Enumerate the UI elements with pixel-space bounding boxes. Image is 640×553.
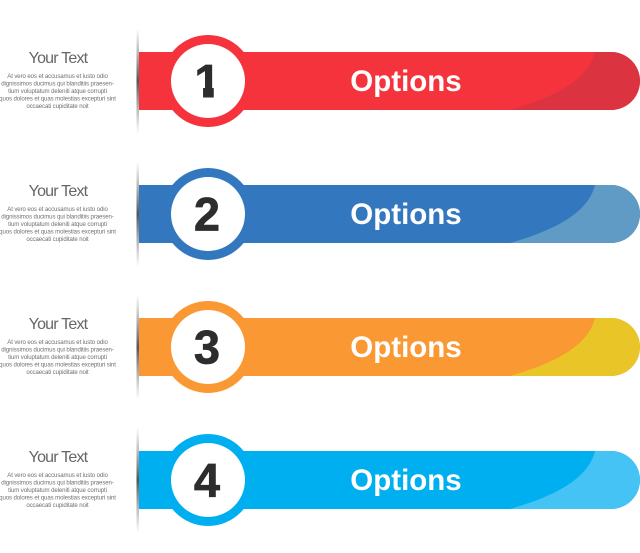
text block: Your Text 2 (0, 183, 116, 243)
number badge 4: 4 (194, 454, 220, 506)
bar 4 (139, 451, 640, 509)
number badge 4 (162, 434, 254, 526)
row 3 (0, 294, 640, 400)
row 2 (0, 161, 640, 267)
text block: Your Text 1: Your Text (29, 50, 89, 67)
number badge 3: 3 (194, 320, 220, 374)
shadow divider 1 (136, 28, 139, 134)
text block: Your Text 3: At vero eos et accusamus et iusto odio (7, 339, 108, 346)
text block: Your Text 4: occaecati cupiditate noit (26, 502, 89, 509)
text block: Your Text 4: dignissimos ducimus qui blanditiis praesen- (1, 480, 114, 486)
bar 3 (139, 318, 640, 376)
text block: Your Text 3: quos dolores et quas molestias excepturi sint (0, 362, 116, 368)
text block: Your Text 3: tium voluptatum deleniti atque corrupti (8, 354, 107, 361)
row 4 (0, 427, 640, 533)
text block: Your Text 2: tium voluptatum deleniti atque corrupti (8, 221, 107, 228)
shadow divider 4 (136, 427, 139, 533)
text block: Your Text 3: occaecati cupiditate noit (26, 369, 89, 376)
text block: Your Text 4: Your Text (29, 449, 89, 466)
text block: Your Text 4: At vero eos et accusamus et iusto odio (7, 472, 108, 479)
row 1 (0, 28, 640, 134)
bar 1 (139, 52, 640, 110)
text block: Your Text 3: Your Text (29, 316, 89, 333)
text block: Your Text 1: dignissimos ducimus qui blanditiis praesen- (1, 80, 114, 88)
text block: Your Text 4 (0, 449, 116, 509)
text block: Your Text 1 (0, 50, 116, 110)
text block: Your Text 2: Your Text (29, 183, 89, 200)
label: Options 2: Options (350, 198, 462, 231)
text block: Your Text 1: quos dolores et quas molestias excepturi sint (0, 96, 116, 102)
text block: Your Text 3 (0, 316, 116, 376)
shadow divider 3 (136, 294, 139, 400)
bar 2 (139, 185, 640, 243)
text block: Your Text 3: dignissimos ducimus qui blanditiis praesen- (1, 346, 114, 354)
text block: Your Text 2: occaecati cupiditate noit (26, 236, 89, 243)
text block: Your Text 1: At vero eos et accusamus et iusto odio (7, 73, 108, 80)
text block: Your Text 2: quos dolores et quas molestias excepturi sint (0, 228, 116, 236)
label: Options 1: Options (350, 65, 462, 98)
text block: Your Text 2: At vero eos et accusamus et iusto odio (7, 206, 108, 213)
text block: Your Text 4: quos dolores et quas molestias excepturi sint (0, 494, 116, 502)
text block: Your Text 4: tium voluptatum deleniti atque corrupti (8, 487, 107, 494)
label: Options 3: Options (350, 331, 462, 364)
number badge 2: 2 (194, 188, 220, 240)
number badge 2 (162, 168, 254, 260)
number badge 1: 1 (194, 54, 220, 108)
shadow divider 2 (136, 161, 139, 267)
text block: Your Text 1: tium voluptatum deleniti atque corrupti (8, 88, 107, 95)
label: Options 4: Options (350, 464, 462, 497)
number badge 3 (162, 301, 254, 393)
text block: Your Text 1: occaecati cupiditate noit (26, 103, 89, 110)
number badge 1 (162, 35, 254, 127)
text block: Your Text 2: dignissimos ducimus qui blanditiis praesen- (1, 214, 114, 220)
